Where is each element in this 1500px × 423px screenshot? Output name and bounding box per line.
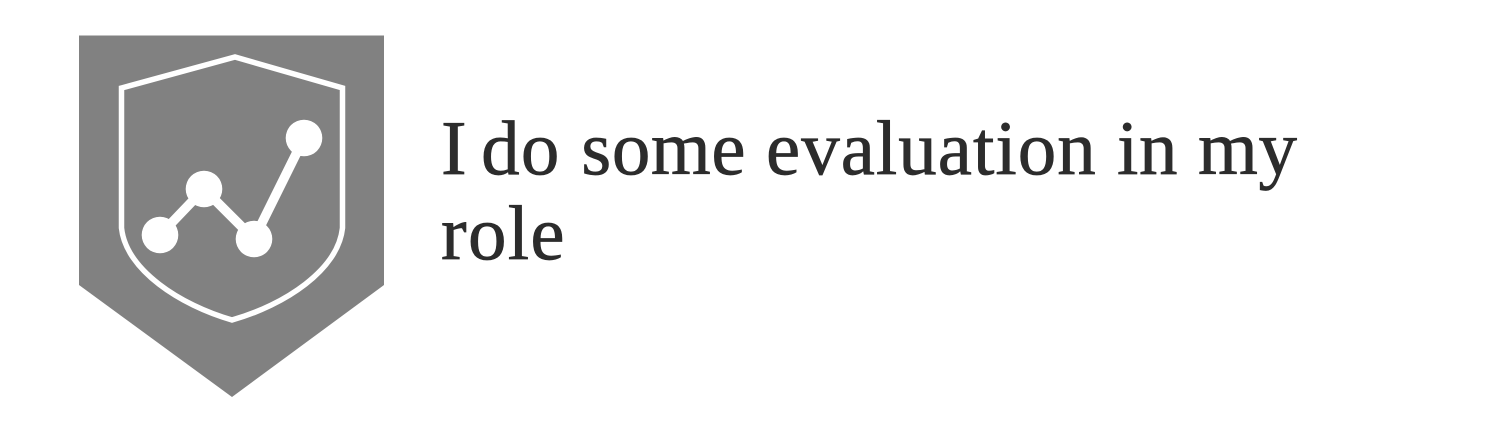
text block: statement: I do some evaluation in my (441, 105, 1298, 191)
text block: statement (441, 105, 1298, 276)
text block: statement: role (441, 190, 566, 276)
icon: shield badge with line chart (79, 36, 384, 397)
